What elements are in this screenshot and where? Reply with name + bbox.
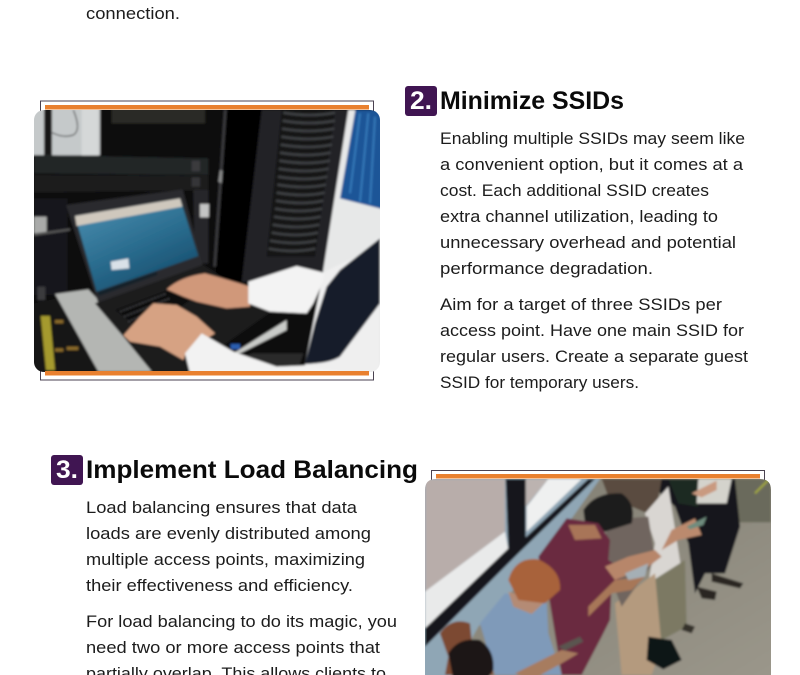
text block: load balancing purpose: their effectiveness and efficiency.	[86, 577, 353, 595]
text block: load balancing purpose: loads are evenly distributed among	[86, 525, 371, 543]
frame outline	[432, 470, 764, 480]
text block: overlap requirement: need two or more access points that	[86, 639, 380, 657]
heading: Implement Load Balancing: Implement Load Balancing	[86, 456, 418, 484]
text block: load balancing purpose: Load balancing ensures that data	[86, 499, 358, 517]
text block: SSID cost: cost. Each additional SSID creates	[440, 182, 709, 200]
bottom orange bar	[45, 371, 369, 376]
top orange bar	[436, 474, 760, 478]
text: end of previous section: connection.	[86, 5, 180, 23]
badge: step 3	[51, 455, 83, 485]
badge: step 3: 3.	[56, 456, 78, 484]
text block: SSID target	[440, 296, 748, 392]
text block: SSID target: SSID for temporary users.	[440, 374, 639, 392]
text block: SSID target: Aim for a target of three SSIDs per	[440, 296, 723, 314]
text block: SSID cost: extra channel utilization, leading to	[440, 208, 718, 226]
text block: SSID cost	[440, 130, 745, 278]
photo: technician typing on laptop at server rack	[30, 107, 383, 373]
badge: step 2: 2.	[410, 87, 432, 115]
image frame: group with phones photo	[422, 470, 775, 675]
top orange bar	[45, 105, 369, 110]
text block: SSID cost: performance degradation.	[440, 260, 653, 278]
photo: people using phones by a window	[422, 477, 775, 675]
text block: SSID target: access point. Have one main SSID for	[440, 322, 745, 340]
text block: load balancing purpose: multiple access points, maximizing	[86, 551, 365, 569]
frame outline	[40, 101, 374, 380]
text block: overlap requirement: For load balancing to do its magic, you	[86, 613, 397, 631]
heading: Minimize SSIDs: Minimize SSIDs	[440, 87, 624, 115]
text block: overlap requirement	[86, 613, 397, 675]
text block: SSID cost: Enabling multiple SSIDs may seem like	[440, 130, 745, 148]
text block: SSID cost: unnecessary overhead and potential	[440, 234, 736, 252]
text block: SSID cost: a convenient option, but it comes at a	[440, 156, 744, 174]
text block: SSID target: regular users. Create a separate guest	[440, 348, 748, 366]
badge: step 2	[405, 86, 437, 116]
text block: load balancing purpose	[86, 499, 371, 595]
image frame: server rack photo	[30, 101, 383, 380]
